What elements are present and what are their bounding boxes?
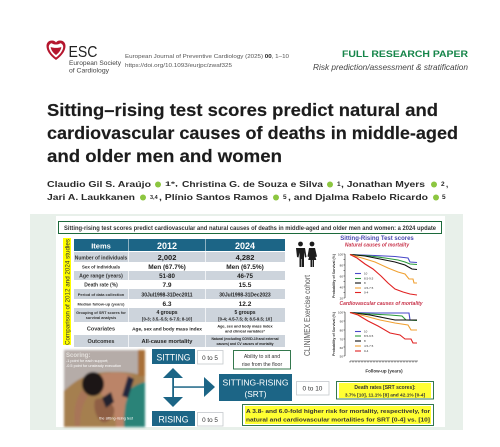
logo society name <box>69 60 122 74</box>
table column 2012: 51-80 <box>159 273 175 280</box>
table column 2024: [0-4; 4.5-7.5; 8; 8.5-9.5; 10] <box>218 316 272 322</box>
header: ESC logo and journal information <box>46 40 468 74</box>
authors <box>47 180 448 202</box>
table row labels: Sex of individuals <box>82 264 121 270</box>
title: Sitting–rising test scores predict natural and <box>47 100 438 120</box>
table column 2024: Natural (excluding COVID-19 and external <box>211 337 279 341</box>
authors: Christina G. de Souza e Silva <box>182 180 324 189</box>
chart legend: 8.5-9.5 <box>364 334 374 338</box>
table row labels: Covariates <box>87 326 115 332</box>
vertical label: cohort: CLINIMEX Exercise cohort <box>302 274 312 356</box>
chart title: Sitting-Rising Test scores <box>340 236 414 242</box>
table column 2012 <box>132 253 202 345</box>
table row labels: Grouping of SRT scores for <box>76 311 126 315</box>
chart: cardiovascular causes of mortality: 90 <box>340 320 343 324</box>
SRT box: SITTING-RISING <box>222 378 288 388</box>
table column 2024 <box>211 253 279 346</box>
chart legend: 0-4 <box>364 349 369 353</box>
authors: Jari A. Laukkanen <box>47 193 135 202</box>
logo society name: European Society <box>69 60 122 67</box>
table column 2012: [0-3; 3.5.-5.5; 6-7.5; 8-10] <box>142 316 193 322</box>
chart: cardiovascular causes of mortality: 70 <box>340 338 343 342</box>
chart: cardiovascular causes of mortality: Probability of Survival (%) <box>332 311 336 356</box>
title: cardiovascular causes of deaths in middle-aged <box>47 123 458 143</box>
journal citation: European Journal of Preventive Cardiology (2025) 00, 1–10 <box>125 54 289 60</box>
authors: , <box>446 180 448 189</box>
panel background <box>30 214 463 430</box>
paper type label: FULL RESEARCH PAPER <box>342 49 468 60</box>
authors: 1 <box>337 181 341 188</box>
authors: 2 <box>441 181 445 188</box>
chart: natural causes of mortality: Probability of Survival (%) <box>332 253 336 298</box>
chart legend: 4.5-7.5 <box>364 286 374 290</box>
authors: 5 <box>442 194 446 201</box>
x axis title: Follow-up (years) <box>365 368 403 374</box>
chart: natural causes of mortality: 100 <box>338 252 343 256</box>
table column 2024: 5 groups <box>234 310 256 316</box>
ability callout <box>234 350 290 369</box>
table column 2012: 30Jul1998-31Dec2011 <box>141 292 193 298</box>
icon: ESC heart logo <box>46 40 66 60</box>
chart legend <box>355 272 374 294</box>
photo caption: scoring: -1 point for each support; <box>66 359 108 363</box>
SRT score <box>296 382 329 395</box>
chart: natural causes of mortality: 80 <box>340 264 343 268</box>
photo caption: scoring: the sitting-rising test <box>99 416 134 420</box>
table header <box>91 241 255 251</box>
table row labels <box>75 256 127 345</box>
higher risk callout: natural and cardiovascular mortalities for SRT [0-4] vs. [10] <box>246 418 430 424</box>
table column 2024: 15.5 <box>239 282 252 289</box>
table header: 2012 <box>157 241 177 251</box>
table column 2024: 30Jul1998-31Dec2023 <box>219 292 271 298</box>
table row labels: Age range (years) <box>79 274 123 280</box>
death rates callout: Death rates [SRT scores]: <box>354 385 416 391</box>
authors: Claudio Gil S. Araújo <box>47 180 151 189</box>
table column 2024: Men (67.5%) <box>226 264 264 271</box>
table column 2024: Age, sex and body mass index <box>217 324 274 328</box>
photo caption: scoring <box>66 353 134 420</box>
vertical label: comparison: Comparison of 2012 and 2024 studies <box>64 238 72 345</box>
table column 2024: 46-75 <box>237 273 253 280</box>
paper category: Risk prediction/assessment & stratification <box>313 62 468 72</box>
table column 2012: Age, sex and body mass index <box>132 326 202 332</box>
authors: , Jonathan Myers <box>341 180 426 189</box>
SITTING box <box>152 349 195 364</box>
sitting score: 0 to 5 <box>202 355 218 362</box>
higher risk callout <box>242 404 434 426</box>
table column 2012: 6.3 <box>162 301 172 308</box>
authors: , and Djalma Rabelo Ricardo <box>288 193 428 202</box>
chart: natural causes of mortality: 20 <box>340 296 343 300</box>
abstract heading <box>58 222 442 234</box>
chart legend: 10 <box>364 330 368 334</box>
abstract heading: Sitting-rising test scores predict cardiovascular and natural causes of deaths in middle-aged and older men and women: a 2024 update <box>64 225 436 232</box>
chart: natural causes of mortality <box>332 242 417 300</box>
table header: Items <box>91 242 111 250</box>
authors: 5 <box>283 194 287 201</box>
chart: natural causes of mortality: 60 <box>340 274 343 278</box>
RISING box <box>152 411 195 426</box>
table column 2024: 12.2 <box>239 301 252 308</box>
sitting score <box>198 350 223 364</box>
death rates callout: 3.7% [10], 11.1% [8] and 42.1% [0-4] <box>345 392 426 398</box>
RISING box: RISING <box>158 414 188 424</box>
table row labels: Outcomes <box>88 339 114 345</box>
death rates callout <box>336 382 434 399</box>
authors: 3,4 <box>150 195 159 201</box>
table column 2024: and clinical variables* <box>225 330 265 334</box>
table row labels: Median follow-up (years) <box>78 302 125 306</box>
chart: cardiovascular causes of mortality: 100 <box>338 310 343 314</box>
chart subtitle: Cardiovascular causes of mortality <box>339 301 423 307</box>
table column 2012: Men (67.7%) <box>148 264 186 271</box>
chart subtitle: Natural causes of mortality <box>345 242 409 248</box>
table row labels: survival analysis <box>86 316 116 320</box>
journal citation <box>125 54 289 69</box>
chart: cardiovascular causes of mortality: 80 <box>340 328 343 332</box>
chart legend: 10 <box>364 272 368 276</box>
authors: , Plínio Santos Ramos <box>159 193 269 202</box>
photo: man doing the sitting-rising test <box>64 350 145 427</box>
arrow: sitting and rising combine into SRT <box>163 368 215 407</box>
chart: cardiovascular causes of mortality <box>332 301 423 374</box>
table column 2024: causes) and CV causes of mortality <box>216 342 274 346</box>
chart legend: 8 <box>364 281 366 285</box>
rising score <box>198 412 223 426</box>
panel: graphical abstract <box>30 214 463 430</box>
chart legend <box>355 330 374 353</box>
rising score: 0 to 5 <box>202 417 218 424</box>
title <box>47 100 458 166</box>
ability callout: rise from the floor <box>242 362 282 368</box>
table header: 2024 <box>235 241 255 251</box>
table column 2024: 4,282 <box>236 253 254 262</box>
logo wordmark: ESC <box>68 44 98 61</box>
chart legend: 8 <box>364 339 366 343</box>
chart: cardiovascular causes of mortality: 50 <box>340 354 343 358</box>
table row labels: Period of data collection <box>78 292 125 297</box>
SRT score: 0 to 10 <box>303 386 323 392</box>
table column 2012: 2,002 <box>158 253 176 262</box>
SRT box: (SRT) <box>245 389 267 399</box>
table row labels: Number of individuals <box>75 256 127 262</box>
SRT box <box>219 374 292 401</box>
table column 2012: All-cause mortality <box>142 339 193 345</box>
chart: cardiovascular causes of mortality: 60 <box>340 346 343 350</box>
chart legend: 4.5-7.5 <box>364 344 374 348</box>
comparison table <box>74 239 285 347</box>
icon: man and woman <box>296 242 317 267</box>
table row labels: Death rate (%) <box>84 282 118 288</box>
photo caption: scoring: -0.5 point for unsteady execution <box>66 364 121 368</box>
photo caption: scoring: Scoring: <box>66 353 90 359</box>
authors: 1*, <box>165 181 178 188</box>
SITTING box: SITTING <box>156 352 190 362</box>
logo society name: of Cardiology <box>69 68 110 74</box>
table column 2012: 4 groups <box>156 310 178 316</box>
higher risk callout: A 3.8- and 6.0-fold higher risk for mortality, respectively, for <box>246 409 431 415</box>
chart: natural causes of mortality: 40 <box>340 286 343 290</box>
chart legend: 0-4 <box>364 290 369 294</box>
ability callout: Ability to sit and <box>244 354 280 360</box>
table column 2012: 7.9 <box>162 282 172 289</box>
chart legend: 8.5-9.5 <box>364 276 374 280</box>
title: and older men and women <box>47 146 282 166</box>
journal citation: https://doi.org/10.1093/eurjpc/zwaf325 <box>125 63 232 69</box>
